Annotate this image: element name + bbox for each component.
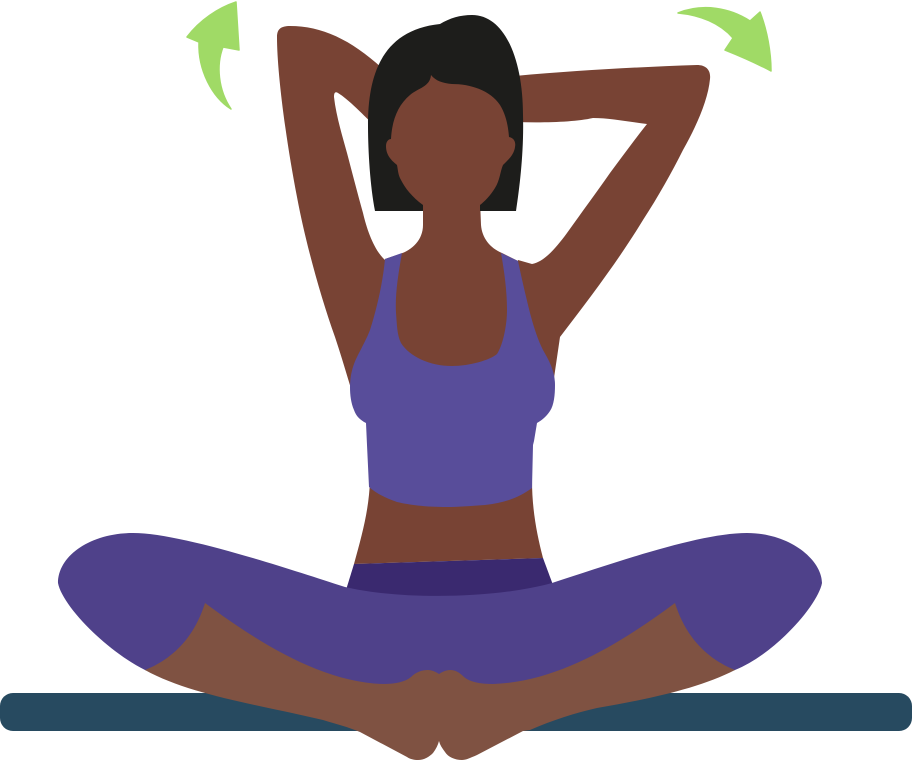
- lower legs and feet: [145, 603, 735, 760]
- leggings waistband: [346, 558, 553, 605]
- leggings: [58, 533, 822, 700]
- hair: [368, 15, 523, 211]
- sports top: [350, 253, 555, 507]
- neck and torso: [354, 200, 543, 564]
- yoga mat: [0, 693, 912, 731]
- arrow: left upward curved: [187, 2, 239, 109]
- left arm: [277, 26, 400, 392]
- right arm: [500, 65, 710, 380]
- head: [386, 75, 515, 215]
- figure arms and torso: [277, 26, 710, 564]
- arrow: right downward curved: [678, 8, 771, 71]
